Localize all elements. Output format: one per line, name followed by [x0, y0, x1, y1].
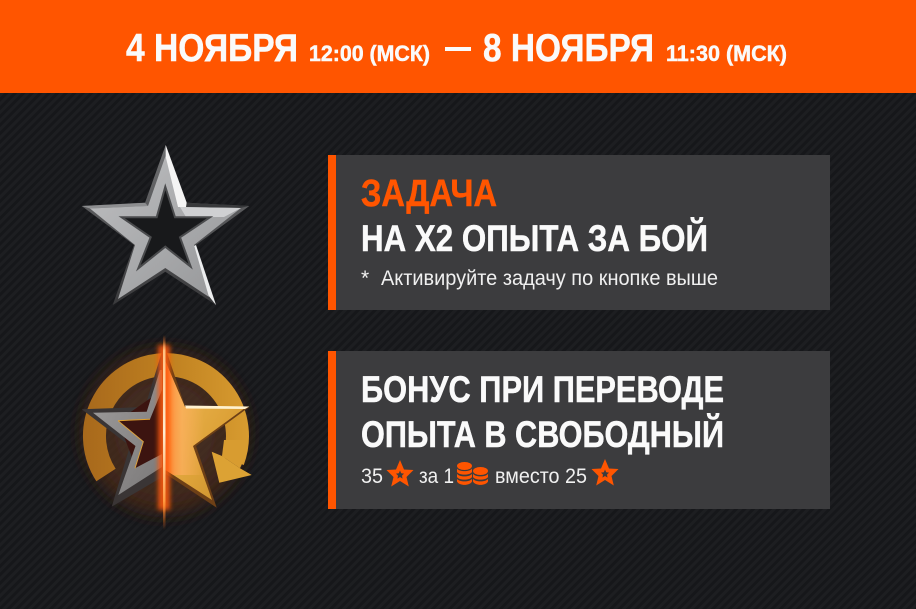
bonus rate line: вместо 25: [495, 465, 587, 488]
icon: orange star: [592, 459, 618, 486]
silver half: [82, 345, 164, 507]
bonus rate line: за 1: [419, 465, 454, 488]
bonus rate line: [361, 459, 618, 488]
bonus rate line: 35: [361, 465, 383, 488]
icon: silver star: [82, 145, 249, 305]
header banner: [0, 0, 916, 93]
bonus title: [361, 369, 724, 455]
icon: split silver and gold star with ring arrow: [71, 335, 259, 530]
panel: bonus: [328, 351, 830, 509]
bonus title: ОПЫТА В СВОБОДНЫЙ: [361, 413, 724, 455]
icon: orange star: [386, 460, 414, 486]
gold half: [164, 345, 249, 508]
task note: Активируйте задачу по кнопке выше: [381, 267, 718, 290]
task note: *: [361, 267, 369, 290]
end date: 8 НОЯБРЯ: [483, 27, 654, 70]
bonus title: БОНУС ПРИ ПЕРЕВОДЕ: [361, 369, 724, 410]
end time: 11:30 (МСК): [666, 41, 787, 66]
panel: task: [328, 155, 830, 310]
icon: coins: [457, 462, 488, 485]
light beam: [158, 345, 170, 510]
dash: [445, 47, 471, 51]
task heading: ЗАДАЧА: [361, 173, 497, 215]
task title: НА X2 ОПЫТА ЗА БОЙ: [361, 217, 708, 259]
ring arrow: [94, 365, 252, 483]
start date: 4 НОЯБРЯ: [126, 27, 298, 70]
start time: 12:00 (МСК): [309, 41, 430, 66]
